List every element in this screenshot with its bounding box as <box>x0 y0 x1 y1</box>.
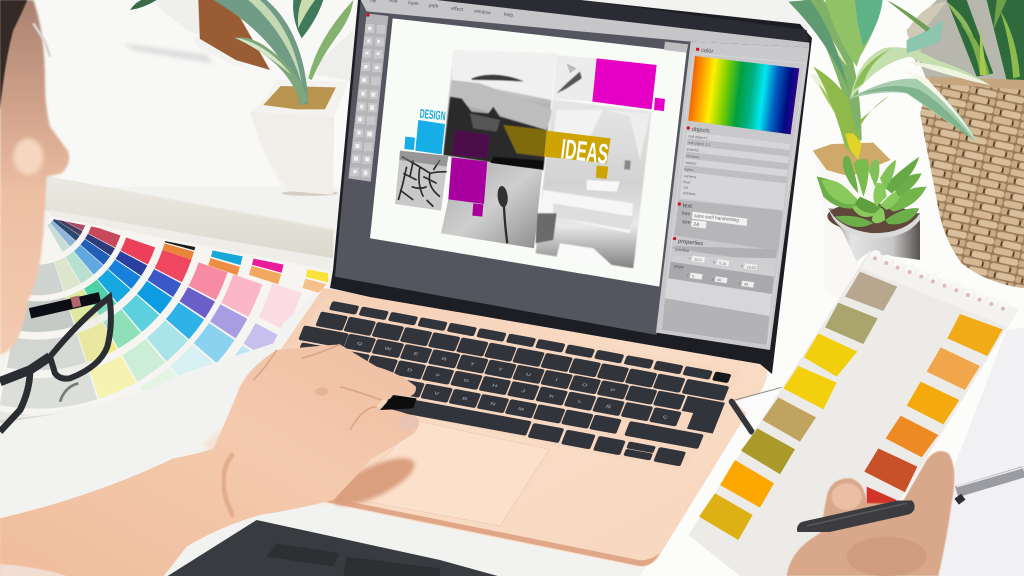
grass blades <box>947 0 1024 80</box>
white paper sheet <box>933 327 1024 576</box>
objects list <box>680 126 790 210</box>
objects list: camera <box>684 174 697 179</box>
succulent leaves <box>817 156 927 227</box>
smartphone <box>732 387 782 432</box>
plant photo <box>441 162 542 248</box>
keyboard keys <box>278 298 735 469</box>
trackpad <box>343 422 549 526</box>
card purples <box>56 220 82 236</box>
notepad sheet <box>688 251 1019 576</box>
pantone colour fan <box>0 216 328 424</box>
properties settings: 5.14 <box>719 261 726 266</box>
silver pot <box>828 208 920 262</box>
properties settings: y <box>713 260 715 264</box>
card greens <box>48 223 70 252</box>
magenta square <box>654 98 665 111</box>
objects list: null object 1.1 <box>688 141 710 147</box>
left potted plant <box>130 0 353 196</box>
screen dark background <box>335 0 693 335</box>
properties settings <box>662 237 777 345</box>
properties settings: 10.22 <box>747 265 756 270</box>
left swatch column <box>699 272 897 540</box>
gold banner with IDEAS <box>544 131 611 170</box>
succulent in silver pot <box>817 156 927 262</box>
shadow of hand on trackpad <box>326 449 420 514</box>
card cyans <box>50 220 76 246</box>
keyboard well <box>270 298 742 472</box>
properties settings: properties <box>678 239 704 247</box>
app menu bar: path <box>428 3 439 10</box>
white surface and phone at bottom right <box>732 327 1024 576</box>
bridge and left lens frame <box>0 357 50 382</box>
metal pen end <box>957 467 1024 502</box>
white pot <box>250 80 348 194</box>
artboard <box>370 18 687 287</box>
right properties panel: color <box>701 48 714 55</box>
black pen <box>805 503 907 529</box>
text settings: text <box>682 203 693 210</box>
properties settings: angle <box>674 263 685 269</box>
reflection on desk <box>203 400 327 503</box>
cheek highlight <box>13 138 43 175</box>
app menu bar: help <box>503 12 514 19</box>
properties settings: y <box>712 277 714 281</box>
card blues <box>52 219 80 241</box>
reading glasses <box>0 297 111 432</box>
text settings: font <box>682 211 691 217</box>
laptop lid bezel <box>330 0 812 374</box>
gold square <box>596 166 608 179</box>
text settings <box>674 200 783 251</box>
bright window side of the desk <box>640 0 1024 576</box>
card reds <box>64 221 86 231</box>
glasses temple <box>30 297 100 313</box>
tree photo <box>395 151 448 211</box>
purple square <box>472 203 483 217</box>
colour swatches <box>0 219 328 420</box>
properties settings: z <box>738 281 740 285</box>
hair <box>0 0 27 110</box>
shelf and back wall area <box>30 0 363 271</box>
properties settings: x <box>687 273 689 277</box>
properties settings: 20.0 <box>694 258 702 262</box>
app menu bar: window <box>474 8 491 16</box>
person's face, blurred foreground <box>0 0 69 355</box>
laptop base <box>203 288 767 567</box>
key pressed under the finger <box>380 395 417 410</box>
spiral rings <box>871 250 1009 310</box>
photo with magenta block <box>553 55 597 102</box>
top-right small button <box>664 42 688 53</box>
objects list: floor <box>683 180 691 185</box>
objects list: interior <box>685 161 698 166</box>
purple block <box>448 157 487 204</box>
magenta block <box>592 58 657 109</box>
properties settings: 90 <box>717 278 722 282</box>
properties settings: 0 <box>692 274 694 279</box>
right lens frame <box>50 297 111 379</box>
objects list: exterior <box>687 147 700 153</box>
fingers and palm <box>787 451 954 576</box>
objects list: lights <box>684 167 693 172</box>
colour heading <box>696 48 699 51</box>
soil <box>263 86 336 109</box>
right potted plant <box>788 0 990 177</box>
leaves <box>788 0 990 160</box>
typing hand and forearm <box>0 344 420 576</box>
text settings: sans serif handwriting <box>694 213 740 223</box>
properties settings: z <box>741 264 743 268</box>
grass pot <box>907 0 1024 80</box>
right swatch column <box>864 314 1003 507</box>
properties settings: x <box>689 256 691 260</box>
right properties panel <box>656 42 809 350</box>
objects list: car <box>683 185 689 190</box>
notepad with colour swatches <box>688 250 1019 576</box>
sleeve <box>0 564 68 576</box>
room photo <box>536 99 652 268</box>
cyan block <box>415 120 445 154</box>
properties settings: 45 <box>744 282 748 287</box>
app menu bar: layer <box>408 0 420 7</box>
objects list: objects <box>691 127 710 135</box>
cyan square <box>404 137 415 150</box>
text settings: size <box>682 219 691 225</box>
wicker basket with grass <box>907 0 1024 288</box>
ring holes <box>873 256 1005 311</box>
toolbar <box>348 13 388 182</box>
text settings: 24 <box>693 222 699 228</box>
laptop screen <box>335 0 809 350</box>
glasses worn, blurred <box>33 23 50 57</box>
colour spectrum <box>688 56 799 134</box>
gold banner with IDEAS: IDEAS <box>559 133 610 170</box>
objects list: furniture <box>686 154 700 159</box>
objects list: null object 1 <box>688 134 708 140</box>
app menu bar: effect <box>451 6 464 13</box>
front rim <box>327 498 660 566</box>
background objects behind left plant <box>123 0 353 82</box>
pale pot reflection <box>813 150 890 300</box>
DESIGN label: DESIGN <box>419 107 446 123</box>
landscape photo <box>443 50 557 170</box>
objects list: airplane <box>683 191 696 196</box>
soil <box>813 143 891 177</box>
properties settings: position <box>675 247 689 253</box>
key legends <box>343 342 676 438</box>
basket <box>920 77 1024 288</box>
app menu bar <box>361 0 809 47</box>
keyboard deck <box>220 288 767 567</box>
leaves <box>213 0 308 105</box>
pot shadow <box>282 191 338 196</box>
card yellows <box>54 257 80 291</box>
dark tablet under the arm <box>167 520 500 576</box>
hand holding pen <box>787 451 1024 576</box>
card greys <box>30 262 64 296</box>
